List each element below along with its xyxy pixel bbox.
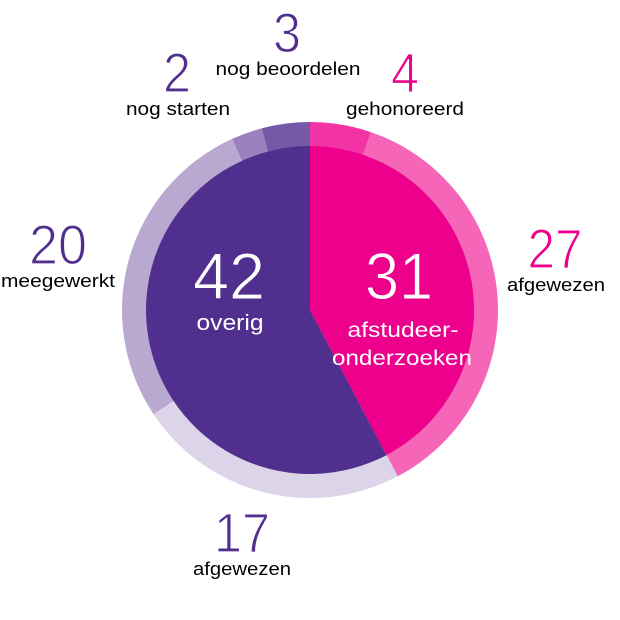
segment: afgewezen 27 <box>310 132 498 476</box>
label: 3 nog beoordelen: nog beoordelen <box>216 59 360 79</box>
label: 2 nog starten <box>126 41 230 119</box>
label: 3 nog beoordelen: 3 <box>273 1 301 64</box>
label: 27 afgewezen: 27 <box>528 217 582 280</box>
segment: afgewezen 17 <box>154 310 398 498</box>
segment: nog starten 2 <box>232 128 310 310</box>
label: 31 afstudeeronderzoeken: 31 <box>365 239 433 313</box>
label: 27 afgewezen <box>507 217 605 295</box>
label: 31 afstudeeronderzoeken: onderzoeken <box>332 347 472 370</box>
chart: outer ring <box>122 122 498 498</box>
chart: inner pie <box>146 146 474 474</box>
label: 4 gehonoreerd: gehonoreerd <box>346 99 464 119</box>
label: 42 overig: 42 <box>193 239 265 313</box>
label: 31 afstudeeronderzoeken <box>332 239 472 370</box>
label: 17 afgewezen: 17 <box>214 501 270 564</box>
segment: overig 42 <box>146 146 386 474</box>
label: 3 nog beoordelen <box>216 1 360 79</box>
label: 2 nog starten: nog starten <box>126 99 230 119</box>
label: 17 afgewezen <box>193 501 291 579</box>
label: 20 meegewerkt: meegewerkt <box>1 271 115 291</box>
segment: meegewerkt 20 <box>122 139 310 414</box>
segment: afstudeeronderzoeken 31 <box>310 146 474 455</box>
label: 4 gehonoreerd: 4 <box>391 41 419 104</box>
segment: gehonoreerd 4 <box>310 122 371 310</box>
label: 27 afgewezen: afgewezen <box>507 275 605 295</box>
segment: nog beoordelen 3 <box>262 122 310 310</box>
label: 42 overig: overig <box>196 310 264 335</box>
label: 2 nog starten: 2 <box>163 41 191 104</box>
label: 20 meegewerkt <box>1 213 115 291</box>
label: 20 meegewerkt: 20 <box>29 213 87 276</box>
label: 4 gehonoreerd <box>346 41 464 119</box>
label: 17 afgewezen: afgewezen <box>193 559 291 579</box>
label: 31 afstudeeronderzoeken: afstudeer- <box>348 319 458 342</box>
